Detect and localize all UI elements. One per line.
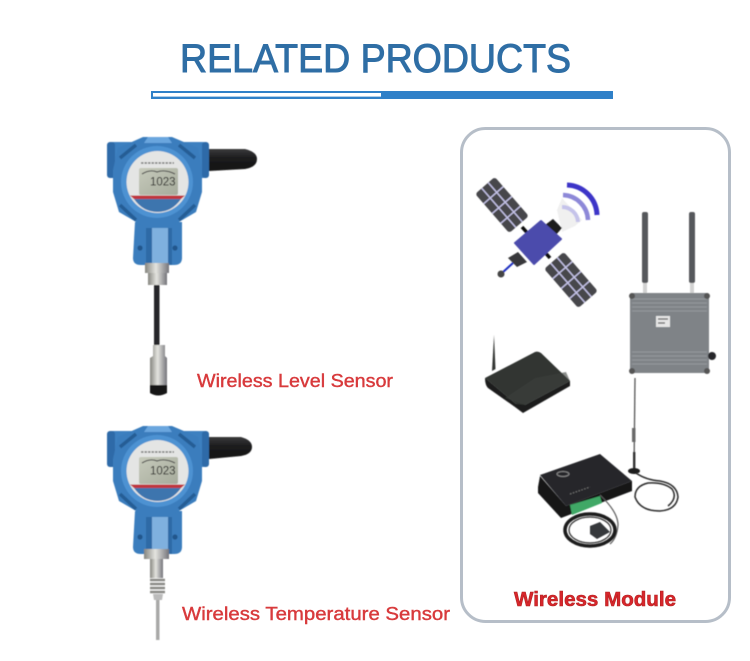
icon: whip antenna <box>628 378 640 474</box>
cable gland <box>708 352 716 360</box>
icon: satellite <box>475 177 598 308</box>
dish mount <box>545 219 562 236</box>
GPS cable coil <box>565 514 615 546</box>
steel neck <box>150 559 163 578</box>
label: wireless module: Wireless Module <box>514 589 676 611</box>
product: wireless level sensor <box>107 137 257 396</box>
terminal front <box>538 476 632 518</box>
antenna cable loop <box>635 473 678 511</box>
hex nut <box>144 549 169 559</box>
logo <box>557 472 569 476</box>
threaded section <box>150 580 165 592</box>
solar panel arms <box>522 227 550 258</box>
probe tip <box>150 385 167 396</box>
GPS puck <box>590 522 610 539</box>
body <box>515 221 561 264</box>
status leds <box>570 487 590 494</box>
green terminal blocks <box>570 496 602 515</box>
panel: wireless module <box>462 128 730 622</box>
thin stem <box>156 600 160 640</box>
black cable <box>154 285 160 345</box>
signal waves <box>567 185 597 215</box>
label: wireless temperature sensor: Wireless Temperature Sensor <box>182 604 450 624</box>
GPS cable <box>600 495 618 544</box>
steel probe <box>150 345 167 385</box>
antenna <box>209 149 257 171</box>
enclosure <box>630 293 709 373</box>
lower thruster <box>508 252 527 267</box>
label: wireless level sensor: Wireless Level Sensor <box>197 371 393 391</box>
solar panel upper <box>475 177 529 233</box>
hex fitting <box>145 263 169 273</box>
icon: data terminal with cables <box>538 454 678 546</box>
product: wireless temperature sensor <box>107 426 252 640</box>
threaded connector <box>148 273 167 285</box>
label plate <box>656 316 670 327</box>
icon: outdoor wireless gateway <box>629 212 716 374</box>
icon: router <box>485 335 570 413</box>
terminal top <box>540 454 632 506</box>
title: RELATED PRODUCTS <box>180 37 571 81</box>
antenna <box>209 437 252 459</box>
signal cone <box>557 198 582 232</box>
title underline bar <box>151 91 613 99</box>
antennas <box>642 212 648 283</box>
solar panel lower <box>544 252 598 308</box>
